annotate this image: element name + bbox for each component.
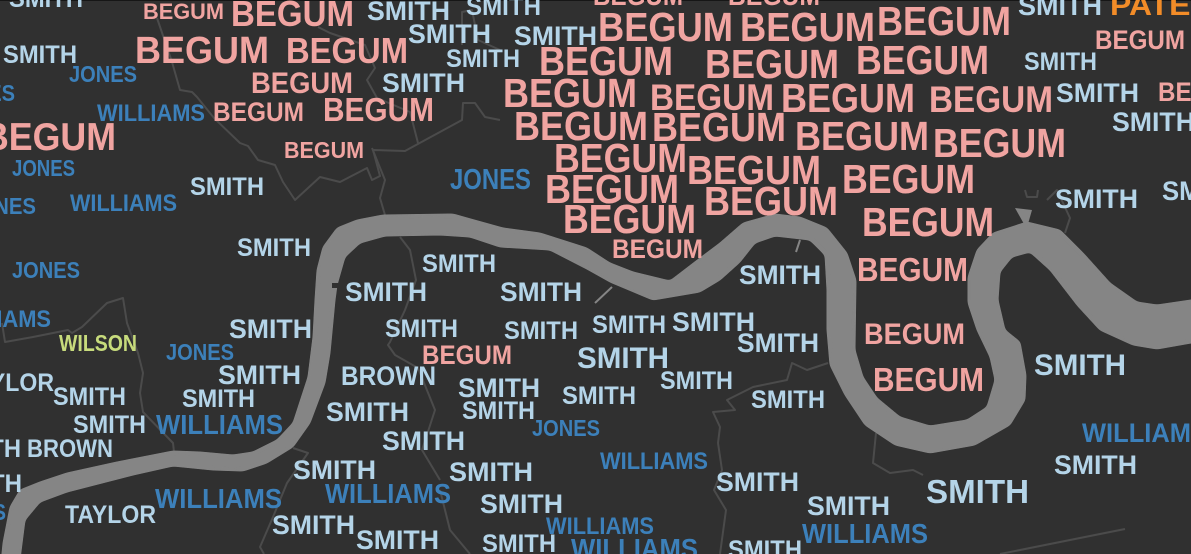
surname labels: Smith: BROWN — [27, 435, 113, 463]
surname labels: Smith: BROWN — [341, 361, 436, 391]
river Thames — [0, 208, 1191, 554]
surname labels: Smith: SMITH — [577, 342, 669, 375]
surname labels: Smith: SMITH — [345, 277, 427, 307]
surname labels: Jones and Williams: WILLIAMS — [155, 483, 282, 514]
surname labels: Smith: SMITH — [73, 411, 146, 439]
surname labels: Begum: BEGUM — [933, 120, 1066, 166]
surname labels: Begum: BEGUM — [842, 156, 975, 202]
surname labels: Jones and Williams: WILLIAMS — [325, 478, 451, 509]
surname labels: Begum: BEGUM — [795, 113, 929, 159]
surname labels: Smith: SMITH — [504, 317, 578, 345]
surname labels: Smith: SMITH — [458, 373, 540, 403]
surname labels: Smith: SMITH — [53, 383, 126, 411]
surname labels: Begum: BEGUM — [514, 103, 648, 149]
surname labels: Smith: SMITH — [1024, 48, 1097, 76]
surname labels: Jones and Williams: WILLIAMS — [70, 190, 177, 217]
surname labels: Begum: BEGUM — [781, 75, 915, 121]
surname labels: Smith: SMITH — [672, 307, 755, 337]
surname labels: Jones and Williams: WILLIAMS — [802, 518, 928, 549]
surname labels: Smith: SMITH — [716, 467, 799, 497]
surname labels: Begum: BEGUM — [652, 104, 786, 150]
surname labels: Begum: BEGUM — [422, 340, 512, 370]
surname labels: Smith: SMITH — [562, 382, 636, 410]
surname labels: Smith: SMITH — [739, 260, 821, 290]
surname labels: Jones and Williams: WILLIAMS — [546, 513, 654, 540]
surname labels: Jones and Williams: WILLIAMS — [97, 100, 205, 127]
surname labels: Smith: SMITH — [480, 489, 563, 519]
surname labels: Smith: SMITH — [326, 397, 409, 427]
surname labels: Begum: BEGUM — [864, 318, 965, 351]
surname labels: Smith: SMITH — [237, 234, 311, 262]
surname labels: Smith: SMITH — [449, 457, 533, 487]
surname labels: Begum: BEGUM — [563, 196, 696, 242]
surname labels: Smith: SMITH — [500, 277, 582, 307]
surname labels: Begum: BEGUM — [598, 4, 733, 50]
surname labels: Smith: SMITH — [218, 360, 301, 390]
surname labels: Smith: SMITH — [408, 19, 491, 49]
surname labels: Begum: BEGUM — [554, 135, 687, 181]
surname labels: Smith: SMITH — [293, 455, 376, 485]
surname labels: Smith: SMITH — [926, 473, 1029, 510]
surname labels: Smith: SMITH — [422, 250, 496, 278]
surname labels: Smith: SMITH — [382, 68, 465, 98]
surname labels: Smith: SMITH — [382, 426, 465, 456]
surname labels: Begum — [0, 0, 1191, 398]
surname labels: Smith: SMITH — [3, 41, 77, 69]
surname labels: Begum: BEGUM — [740, 4, 875, 50]
surname labels: Begum: BEGUM — [251, 67, 353, 100]
surname labels: Begum: BEGUM — [545, 166, 679, 212]
surname labels: Smith: SMITH — [1055, 184, 1138, 214]
surname labels: Jones and Williams: JONES — [450, 164, 531, 196]
surname labels: Begum: BEGUM — [503, 70, 637, 116]
surname labels: Begum: BEGUM — [929, 79, 1053, 120]
surname labels: Smith: SMITH — [751, 386, 825, 414]
surname labels: Smith: SMITH — [1056, 78, 1139, 108]
surname labels: Begum: BEGUM — [856, 37, 989, 83]
surname labels: Smith: SMITH — [737, 328, 819, 358]
surname labels: Smith: SMITH — [182, 385, 255, 413]
surname labels: Jones and Williams: WILLIAMS — [600, 448, 708, 475]
surname labels: Smith: SMITH — [807, 491, 890, 521]
surname labels: Begum: BEGUM — [873, 361, 984, 398]
surname labels: Smith: SMITH — [462, 397, 535, 425]
surname labels: Begum: BEGUM — [284, 137, 364, 163]
surname labels: Jones and Williams: JONES — [12, 257, 80, 283]
surname labels: Smith: SMITH — [1034, 349, 1126, 382]
surname labels: Smith: SMITH — [514, 21, 597, 51]
surname labels: Jones and Williams: JONES — [166, 339, 234, 365]
surname labels: Smith: SMITH — [446, 45, 520, 73]
surname labels: Smith: SMITH — [592, 311, 666, 339]
surname labels: Begum: BEGUM — [650, 77, 774, 118]
surname labels: Begum: BEGUM — [213, 97, 304, 127]
surname labels: Jones and Williams: JONES — [532, 415, 600, 441]
surname labels: Smith: SMITH — [190, 173, 264, 201]
surname labels: Begum: BEGUM — [687, 147, 821, 193]
surname label: Wilson: WILSON — [59, 330, 137, 356]
surname labels: Begum: BEGUM — [286, 30, 408, 71]
surname labels: Begum: BEGUM — [862, 199, 994, 245]
surname labels: Jones and Williams: JONES — [69, 61, 137, 87]
surname labels: Smith: SMITH — [272, 510, 355, 540]
surname labels: Smith: SMITH — [1054, 450, 1137, 480]
surname labels: Smith: SMITH — [229, 314, 312, 344]
surname labels: Jones and Williams: JONES — [12, 155, 75, 181]
surname labels: Jones and Williams: WILLIAMS — [156, 409, 283, 440]
surname labels: Smith: SMITH — [385, 315, 458, 343]
surname labels: Begum: BEGUM — [323, 91, 434, 128]
surname labels: Begum: BEGUM — [704, 178, 838, 224]
surname labels: Smith: TAYLOR — [65, 501, 156, 529]
surname labels: Smith: SMITH — [660, 367, 733, 395]
surname labels: Begum: BEGUM — [612, 234, 703, 264]
surname labels: Begum: BEGUM — [539, 38, 673, 84]
surname labels: Begum: BEGUM — [857, 251, 968, 288]
surname labels: Begum: BEGUM — [135, 30, 269, 72]
surname labels: Begum: BEGUM — [705, 41, 839, 87]
